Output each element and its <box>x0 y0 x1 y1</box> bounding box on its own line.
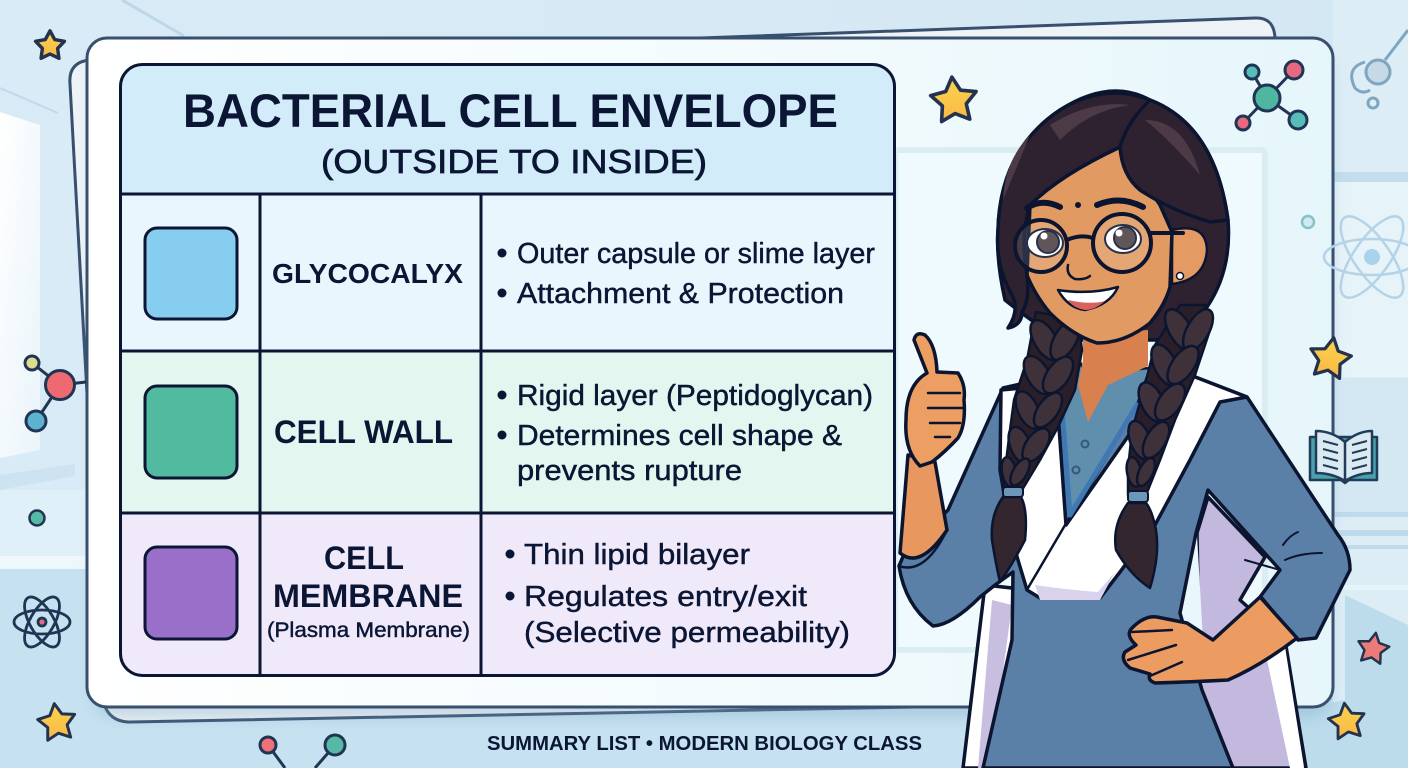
sleeve folds <box>1245 532 1322 640</box>
kurta body <box>899 375 1350 768</box>
inner collar <box>1058 362 1150 520</box>
title: BACTERIAL CELL ENVELOPE <box>183 84 838 137</box>
star: beside table <box>929 75 978 122</box>
label: cell membrane: (Plasma Membrane) <box>267 619 470 642</box>
row: cell membrane <box>121 513 893 675</box>
description: cell membrane: (Selective permeability) <box>524 617 850 649</box>
subtitle: (OUTSIDE TO INSIDE) <box>321 143 707 180</box>
hair highlights <box>1003 104 1200 200</box>
label: cell membrane: MEMBRANE <box>273 578 463 614</box>
nose <box>1068 265 1090 279</box>
description: cell membrane: Regulates entry/exit <box>524 581 807 613</box>
star: top left <box>36 31 64 58</box>
icon: molecule left <box>25 356 86 431</box>
icon: faint molecule top right corner <box>1352 30 1408 108</box>
label: cell membrane: CELL <box>324 540 404 576</box>
face <box>1027 147 1172 343</box>
eyes <box>1027 225 1141 257</box>
icon: molecule top right <box>1236 61 1307 130</box>
back paper sheet <box>70 18 1280 722</box>
table header band <box>121 65 893 194</box>
description: cell wall: Rigid layer (Peptidoglycan) <box>517 380 873 412</box>
lavender coat panels <box>963 497 1306 768</box>
ear <box>1172 228 1207 284</box>
description: cell membrane: Thin lipid bilayer <box>524 539 750 571</box>
colour swatch: cell membrane <box>145 547 237 639</box>
colour swatch: cell wall <box>145 386 237 478</box>
description: cell wall: prevents rupture <box>517 455 742 487</box>
icon: atom <box>14 592 70 652</box>
glasses <box>1015 214 1183 272</box>
description: glycocalyx <box>498 238 875 310</box>
colour swatch: glycocalyx <box>145 228 237 319</box>
left braid <box>992 312 1086 582</box>
description: cell wall: Determines cell shape & <box>517 420 842 452</box>
star: bottom right <box>1326 701 1367 740</box>
star: bottom left <box>36 701 78 741</box>
description: cell wall <box>498 380 873 487</box>
white scarf <box>1000 375 1247 598</box>
label: cell wall: CELL WALL <box>274 414 453 450</box>
star: right <box>1307 334 1354 380</box>
row: cell wall <box>121 351 893 513</box>
right forearm and hand on hip <box>1123 597 1297 683</box>
left arm and thumbs-up hand <box>899 334 964 568</box>
row: glycocalyx <box>121 194 893 351</box>
shirt buttons <box>1072 440 1088 474</box>
bindi <box>1075 202 1081 208</box>
icon: faint atom <box>1324 207 1408 307</box>
label: glycocalyx: GLYCOCALYX <box>272 258 463 289</box>
icon: open book <box>1310 431 1377 483</box>
hair front locks <box>998 93 1228 328</box>
description: glycocalyx: Attachment & Protection <box>517 278 844 310</box>
table <box>120 64 894 676</box>
smile <box>1058 287 1118 310</box>
description: glycocalyx: Outer capsule or slime layer <box>517 238 875 270</box>
icon: teal dot <box>30 510 44 526</box>
neck <box>1078 330 1148 422</box>
eyebrows <box>1027 200 1143 208</box>
right braid <box>1115 305 1219 588</box>
character: student giving thumbs up <box>899 91 1350 768</box>
earring <box>1176 272 1184 280</box>
card shadow <box>92 50 1332 718</box>
icon: small dot right <box>1302 216 1314 228</box>
description: cell membrane <box>506 539 850 649</box>
star: small red <box>1355 630 1391 665</box>
footer caption: SUMMARY LIST • MODERN BIOLOGY CLASS <box>487 733 922 755</box>
label: cell membrane <box>267 540 470 642</box>
icon: molecule bottom <box>260 735 345 768</box>
main card <box>87 38 1333 707</box>
hair behind head <box>998 91 1229 340</box>
